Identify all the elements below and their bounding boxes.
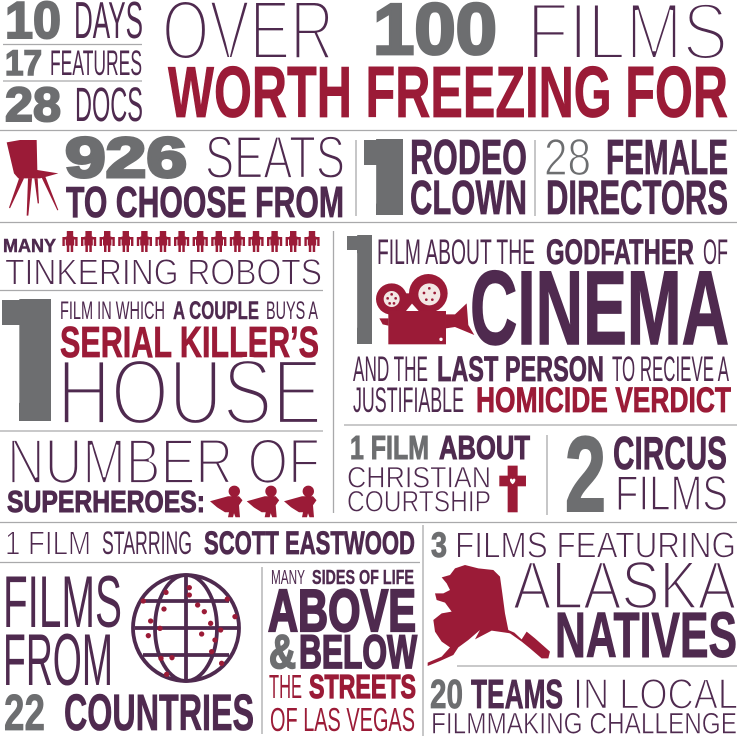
text: film in which a couple buys a: A COUPLE xyxy=(173,297,259,325)
text: films: FILMS xyxy=(3,562,122,643)
panel: tinkering robots xyxy=(3,231,322,292)
panel: female directors xyxy=(544,129,728,225)
text: 20 teams in local: TEAMS xyxy=(471,671,563,717)
text: rodeo: RODEO xyxy=(410,131,527,185)
text: 1 film about xyxy=(350,429,530,466)
stat: 10 days xyxy=(5,0,143,50)
text: many sides of life: SIDES OF LIFE xyxy=(312,567,414,589)
text: 926 seats: SEATS xyxy=(205,124,345,191)
text: 926 seats xyxy=(65,124,345,191)
numeral 1 xyxy=(364,139,403,215)
text: 1 film starring: STARRING xyxy=(102,525,192,561)
text: house: HOUSE xyxy=(57,340,322,444)
title line one xyxy=(162,0,728,77)
panel: number of superheroes xyxy=(7,426,320,519)
panel: alaska natives xyxy=(428,524,737,671)
text: film in which a couple buys a: BUYS A xyxy=(266,297,318,325)
text: & below: & xyxy=(269,625,296,678)
title xyxy=(162,0,728,133)
text: tinkering robots: TINKERING ROBOTS xyxy=(5,252,322,292)
text: 1 film starring xyxy=(5,525,192,562)
text: from: FROM xyxy=(3,620,113,701)
panel: many sides of life xyxy=(268,567,417,736)
panel: seats xyxy=(7,124,345,227)
text: and the last person to recieve a: LAST PERSON xyxy=(437,350,604,389)
text: 20 teams in local xyxy=(430,671,737,719)
icon row: superheroes xyxy=(210,486,316,517)
text: & below xyxy=(269,625,417,678)
text: above: ABOVE xyxy=(268,578,416,644)
text: and the last person to recieve a: AND THE xyxy=(353,350,428,389)
text: 20 teams in local: 20 xyxy=(430,671,463,717)
text: 1 film about: 1 FILM xyxy=(350,429,429,466)
text: many: MANY xyxy=(3,236,56,256)
icon: globe with dots xyxy=(133,575,239,681)
text: serial killer's: SERIAL KILLER’S xyxy=(60,318,319,367)
panel: rodeo clown xyxy=(364,139,526,215)
text: superheroes: SUPERHEROES: xyxy=(7,484,205,519)
text: many sides of life: MANY xyxy=(271,567,305,589)
icon: alaska map xyxy=(428,565,550,666)
text: justifiable homicide verdict xyxy=(353,381,731,420)
numeral 1 xyxy=(347,235,372,344)
panel: festival totals xyxy=(3,0,143,132)
text: to choose from: TO CHOOSE FROM xyxy=(66,178,344,227)
text: clown: CLOWN xyxy=(410,172,527,225)
text: & below: BELOW xyxy=(299,625,417,678)
stat: 28 docs xyxy=(5,79,143,132)
text: 28 female: 28 xyxy=(544,129,591,187)
text: number of: NUMBER OF xyxy=(7,426,320,497)
numeral 1: 1 xyxy=(307,115,472,239)
icon: cross with heart xyxy=(499,466,526,512)
text: DOCS xyxy=(75,79,143,132)
panel: local filmmaking challenge xyxy=(430,671,737,736)
stat: 17 features: 17 xyxy=(5,44,42,83)
text: 1 film starring: 1 FILM xyxy=(5,526,91,562)
text: scott eastwood: SCOTT EASTWOOD xyxy=(204,525,415,561)
text: film about the godfather of: FILM ABOUT THE xyxy=(377,233,535,272)
panel: serial killer's house xyxy=(2,299,318,423)
text: film in which a couple buys a xyxy=(60,297,318,325)
text: many sides of life xyxy=(271,567,414,589)
panel: christian courtship xyxy=(347,429,530,518)
text: justifiable homicide verdict: JUSTIFIABLE xyxy=(353,381,464,420)
panel: festival totals: FEATURES xyxy=(50,44,142,83)
text: 28 female xyxy=(544,129,728,187)
panel: godfather of cinema xyxy=(347,235,731,413)
text: 3 films featuring: 3 xyxy=(431,526,447,565)
text: the streets: STREETS xyxy=(309,668,416,705)
stat: 28 docs: 28 xyxy=(5,79,61,132)
text: the streets: THE xyxy=(269,668,302,705)
stat: 17 features xyxy=(5,44,142,83)
icon: film camera xyxy=(376,274,474,344)
numeral 2: 2 xyxy=(565,414,606,534)
text: 1 film about: ABOUT xyxy=(439,429,530,466)
panel: circus films xyxy=(565,414,728,534)
numeral 1 xyxy=(2,299,51,421)
panel: scott eastwood xyxy=(5,525,415,562)
icon row: robots xyxy=(62,231,320,252)
numeral 1: 1 xyxy=(319,202,410,378)
icon: chair xyxy=(7,140,58,216)
text: the streets xyxy=(269,668,416,705)
text: courtship: COURTSHIP xyxy=(347,485,491,518)
text: 926 seats: 926 xyxy=(65,126,187,190)
text: and the last person to recieve a xyxy=(353,350,729,389)
text: christian: CHRISTIAN xyxy=(347,461,491,494)
text: film in which a couple buys a: FILM IN WHICH xyxy=(60,297,165,325)
panel: films from 22 countries xyxy=(3,562,254,736)
